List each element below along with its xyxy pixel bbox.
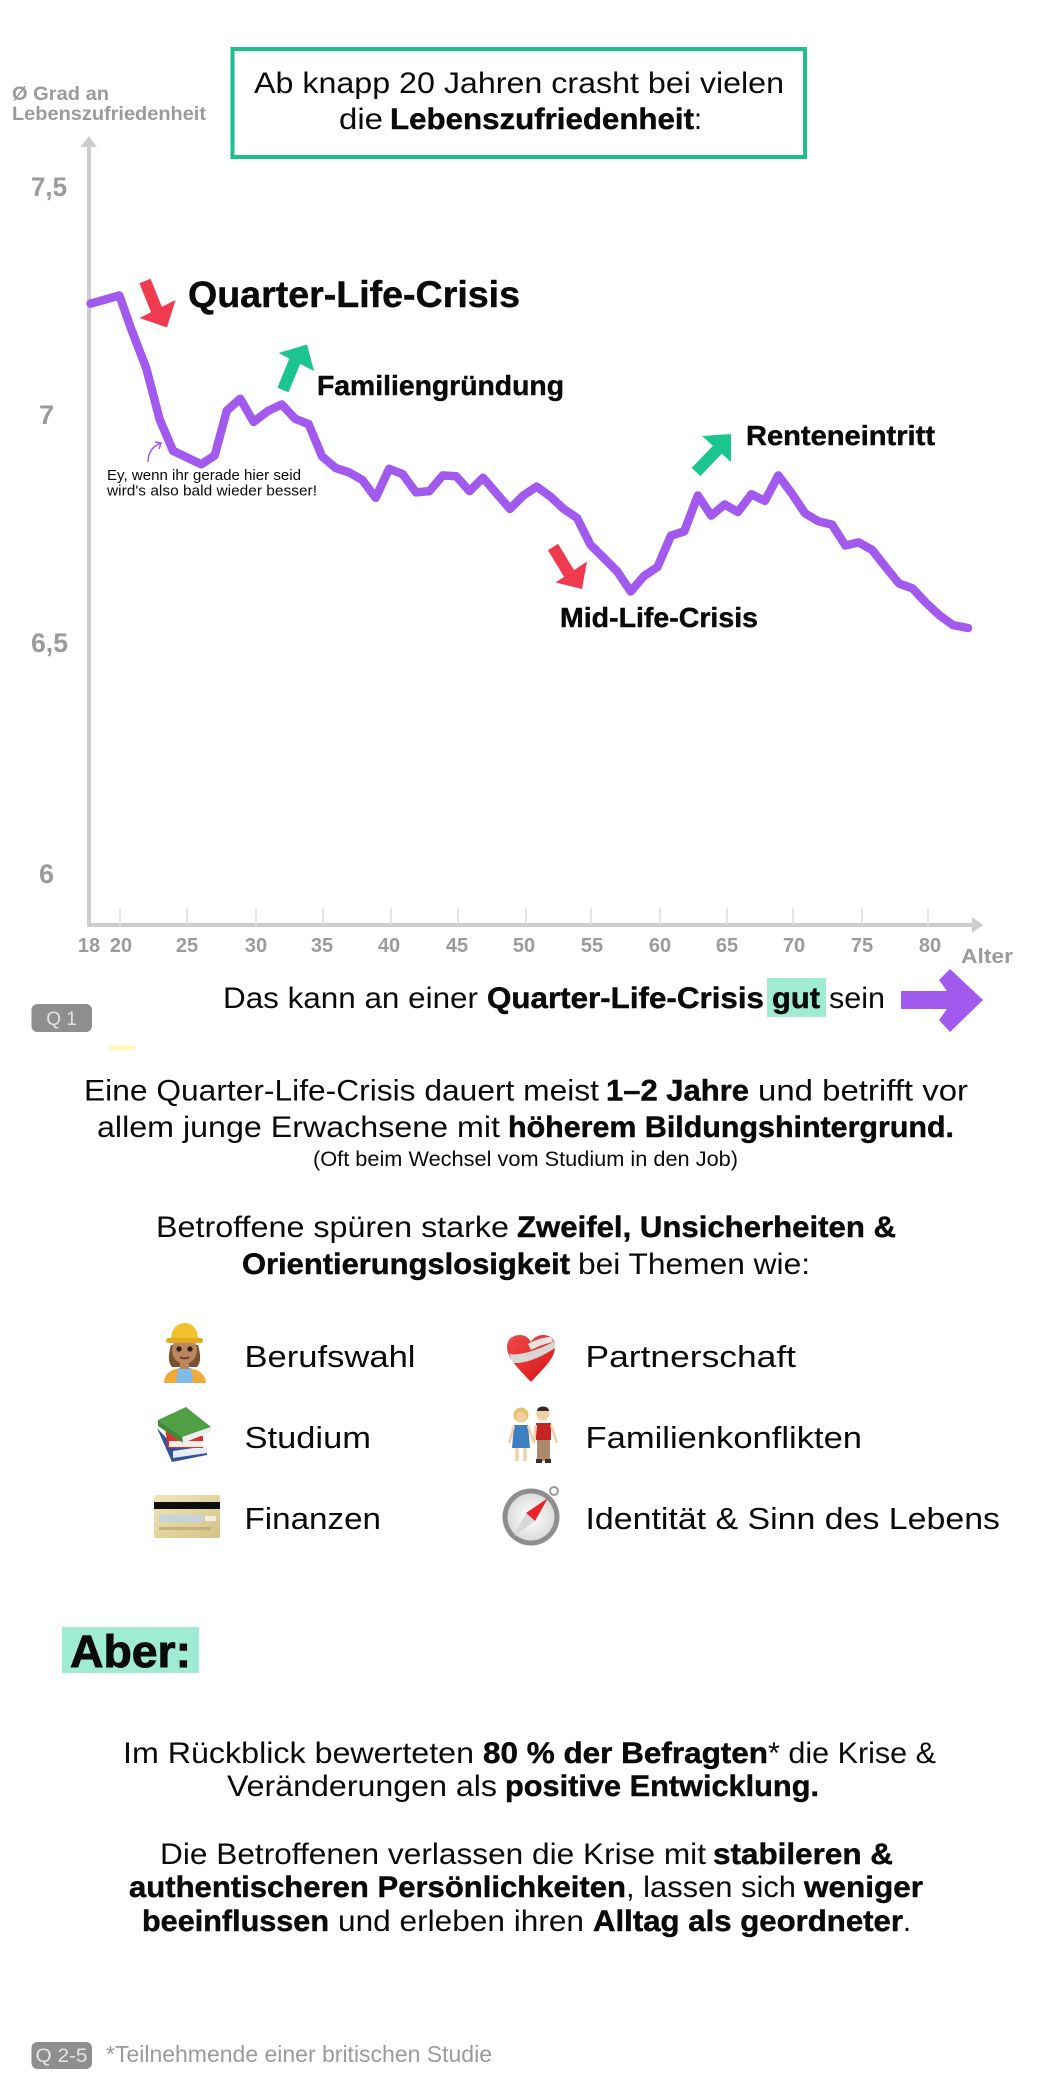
text block: symptoms intro: Orientierungslosigkeit [242,1248,570,1281]
y axis labels: 7 [39,400,54,430]
label: Familiengründung: Familiengründung [317,370,564,401]
text block: retrospective rating: * die Krise & [768,1737,936,1770]
label: Renteneintritt: Renteneintritt [746,420,935,451]
annotation note [106,467,317,500]
label: Mid-Life-Crisis: Mid-Life-Crisis [560,602,758,633]
y axis labels: 7,5 [31,172,67,202]
small curved arrow to the dip [148,442,161,462]
link line: benefits of a crisis: Das kann an einer [223,982,478,1015]
y axis labels: 6 [39,859,54,889]
label: Finanzen: Finanzen [244,1501,381,1536]
label: Berufswahl: Berufswahl [244,1339,416,1374]
text block: symptoms intro [156,1211,896,1281]
text block: duration and who is affected: 1–2 Jahre [606,1074,749,1108]
text block: retrospective rating: Veränderungen als [227,1770,497,1803]
y-axis title: Lebenszufriedenheit [12,104,207,125]
title box: Ab knapp 20 Jahren crasht bei vielen [254,67,784,100]
y axis labels [31,172,68,889]
source badge Q 2-5 [32,2042,92,2069]
y-axis title [12,84,207,125]
link line: benefits of a crisis: sein [829,982,885,1015]
text block: outcome of the crisis: Die Betroffenen verlassen die Krise mit [160,1838,706,1871]
x axis title: Alter [961,946,1013,968]
y axis [80,136,97,927]
x axis labels: 35 [311,935,333,957]
text block: duration and who is affected: und betrifft vor [758,1074,968,1108]
label: Partnerschaft: Partnerschaft [586,1339,796,1374]
text block: outcome of the crisis: Alltag als geordneter [593,1905,904,1938]
footnote: *Teilnehmende einer britischen Studie [106,2041,492,2067]
text block: retrospective rating: Im Rückblick bewerteten [123,1737,474,1770]
line chart: life satisfaction by age [31,136,1013,968]
link line: benefits of a crisis: gut [772,982,820,1015]
icon: construction worker [164,1323,206,1383]
arrow: red down, quarter-life-crisis [140,281,176,328]
text block: symptoms intro: Zweifel, Unsicherheiten & [517,1211,896,1244]
text block: duration and who is affected [84,1074,968,1171]
title box: die [339,103,383,136]
heading: Aber: Aber: [70,1626,191,1677]
icon: couple holding hands [509,1406,557,1463]
title box [232,49,805,157]
x axis labels: 50 [513,935,535,957]
text block: outcome of the crisis: und erleben ihren [338,1905,584,1938]
x axis labels: 25 [176,935,198,957]
text block: retrospective rating [123,1737,936,1803]
label: Quarter-Life-Crisis: Quarter-Life-Crisis [188,274,520,315]
label: Identität & Sinn des Lebens: Identität & Sinn des Lebens [586,1501,1000,1536]
title box: Lebenszufriedenheit [390,103,694,136]
text block: duration and who is affected: Eine Quarter-Life-Crisis dauert meist [84,1074,599,1108]
text block: outcome of the crisis: beeinflussen [142,1905,329,1938]
source badge Q1 [32,1004,92,1032]
text block: symptoms intro: Betroffene spüren starke [156,1211,509,1244]
y axis labels: 6,5 [31,628,68,658]
text block: duration and who is affected: (Oft beim Wechsel vom Studium in den Job) [313,1148,738,1171]
text block: retrospective rating: 80 % der Befragten [483,1737,768,1770]
x axis labels: 30 [245,935,267,957]
x axis labels: 40 [378,935,400,957]
link line: benefits of a crisis [223,978,885,1017]
annotation note: wird's also bald wieder besser! [106,482,317,500]
faint yellow smudge [108,1045,136,1051]
text block: duration and who is affected: höherem Bildungshintergrund. [508,1111,954,1144]
arrow: green up, Familiengründung [278,344,314,390]
icon: stack of books [157,1407,211,1462]
source badge Q 2-5: Q 2-5 [36,2046,88,2067]
x axis labels: 45 [446,935,468,957]
text block: outcome of the crisis [129,1838,924,1938]
purple line [91,296,968,628]
source badge Q1: Q 1 [46,1009,77,1030]
icon: bandaged heart [507,1335,555,1382]
label: Familienkonflikten: Familienkonflikten [586,1420,862,1455]
x axis [88,908,983,933]
x axis labels: 65 [716,935,738,957]
text block: outcome of the crisis: . [903,1905,911,1938]
title box: : [694,103,702,136]
text block: outcome of the crisis: stabileren & [713,1838,893,1871]
y-axis title: Ø Grad an [12,84,109,105]
arrow: green up, Renteneintritt [696,434,731,472]
arrow: red down, mid-life-crisis [553,547,587,589]
text block: duration and who is affected: allem junge Erwachsene mit [97,1111,500,1144]
label: Studium: Studium [244,1420,371,1455]
text block: outcome of the crisis: weniger [803,1871,924,1904]
x axis labels: 18 [78,935,100,957]
x axis labels: 70 [783,935,805,957]
text block: symptoms intro: bei Themen wie: [578,1248,810,1281]
text block: retrospective rating: positive Entwicklung. [505,1770,819,1803]
text block: outcome of the crisis: , lassen sich [626,1871,796,1904]
arrow: big purple right [901,969,983,1032]
x axis labels [78,935,941,957]
x axis labels: 20 [110,935,132,957]
x axis labels: 75 [851,935,873,957]
icon: compass [502,1487,560,1546]
link line: benefits of a crisis: Quarter-Life-Crisis [487,982,764,1015]
annotation note: Ey, wenn ihr gerade hier seid [107,467,301,484]
icon: credit card [154,1495,220,1538]
x axis labels: 55 [581,935,603,957]
x axis labels: 80 [919,935,941,957]
text block: outcome of the crisis: authentischeren Persönlichkeiten [129,1871,626,1904]
x axis labels: 60 [649,935,671,957]
